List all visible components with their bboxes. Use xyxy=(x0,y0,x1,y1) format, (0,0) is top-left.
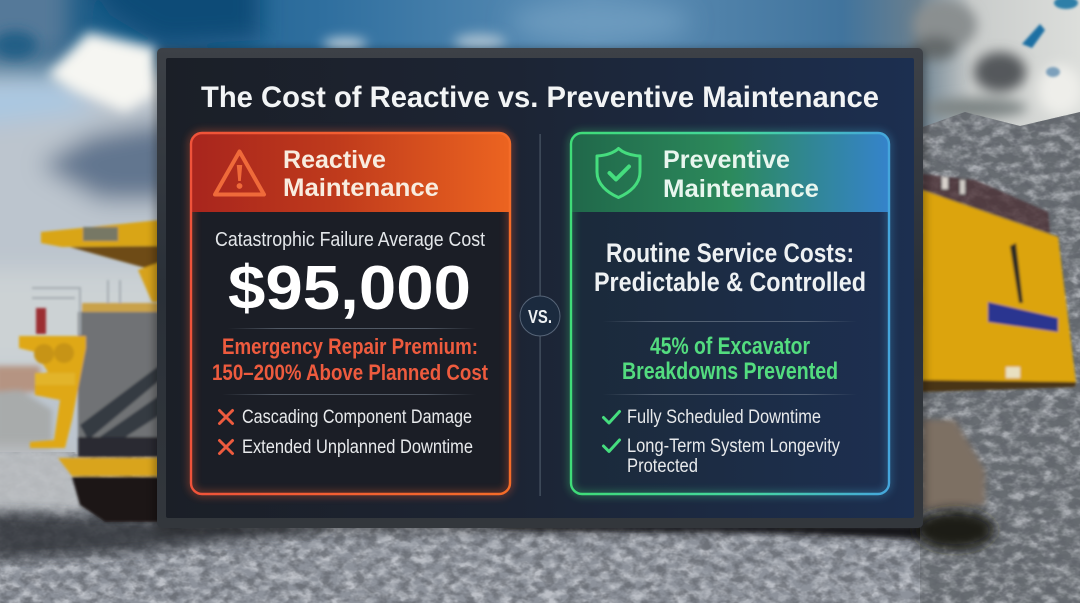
panel: reactive maintenance xyxy=(191,133,510,494)
routine service statement xyxy=(594,238,866,297)
title: The Cost of Reactive vs. Preventive Maintenance xyxy=(201,81,879,114)
background: dump truck xyxy=(19,220,160,522)
dark panel xyxy=(166,58,914,518)
list: reactive consequences: Extended Unplanned Downtime xyxy=(242,437,473,458)
card body xyxy=(571,133,889,494)
list: preventive benefits: Protected xyxy=(627,456,698,477)
emergency premium callout: 150–200% Above Planned Cost xyxy=(212,360,489,385)
vs divider xyxy=(520,134,560,496)
breakdowns prevented callout: Breakdowns Prevented xyxy=(622,358,838,385)
icon: check xyxy=(604,412,620,423)
truck: bed xyxy=(41,220,160,247)
card border xyxy=(571,133,889,494)
background: excavator track xyxy=(915,420,995,550)
panel shadow xyxy=(154,48,926,534)
background: rock pile right xyxy=(920,105,1080,603)
icon: warning triangle xyxy=(215,152,264,194)
vs badge xyxy=(520,296,560,336)
heading: Maintenance xyxy=(283,174,439,202)
cloud: bright white xyxy=(48,32,155,112)
card glow xyxy=(191,133,510,494)
monitor frame xyxy=(157,48,923,528)
list: reactive consequences xyxy=(220,407,473,458)
breakdowns prevented callout: 45% of Excavator xyxy=(650,333,810,360)
card border xyxy=(191,133,510,494)
routine service statement: Predictable & Controlled xyxy=(594,267,866,297)
panel: preventive maintenance xyxy=(571,133,889,494)
background: gravel ground xyxy=(0,446,1080,603)
truck: grey body xyxy=(78,305,160,450)
heading: Reactive xyxy=(283,146,386,174)
background: excavator xyxy=(922,174,1076,392)
heading: Preventive xyxy=(663,146,790,174)
card body xyxy=(191,133,510,494)
heading xyxy=(663,146,819,203)
cost figure: $95,000 xyxy=(228,254,471,323)
breakdowns prevented callout xyxy=(622,333,838,385)
truck: yellow stair tower xyxy=(19,336,86,448)
list: reactive consequences: Cascading Component Damage xyxy=(242,407,472,428)
list: preventive benefits xyxy=(604,407,840,477)
routine service statement: Routine Service Costs: xyxy=(606,238,854,268)
heading: Maintenance xyxy=(663,175,819,203)
icon: check xyxy=(604,440,620,452)
card header xyxy=(191,133,510,212)
list: preventive benefits: Fully Scheduled Downtime xyxy=(627,407,821,428)
icon: shield with check xyxy=(597,148,640,198)
background: sky and clouds xyxy=(0,0,1080,480)
vs divider: VS. xyxy=(528,307,552,327)
emergency premium callout: Emergency Repair Premium: xyxy=(222,334,478,359)
truck: frame and tyre xyxy=(58,458,160,476)
icon: cross xyxy=(220,440,232,454)
card glow xyxy=(571,133,889,494)
list: preventive benefits: Long-Term System Longevity xyxy=(627,436,840,457)
truck: railings xyxy=(32,280,120,335)
heading xyxy=(283,146,439,202)
cost label: Catastrophic Failure Average Cost xyxy=(215,229,485,251)
icon: cross xyxy=(220,410,232,424)
card header xyxy=(571,133,889,212)
background: far ground xyxy=(0,366,52,455)
emergency premium callout xyxy=(212,334,489,385)
